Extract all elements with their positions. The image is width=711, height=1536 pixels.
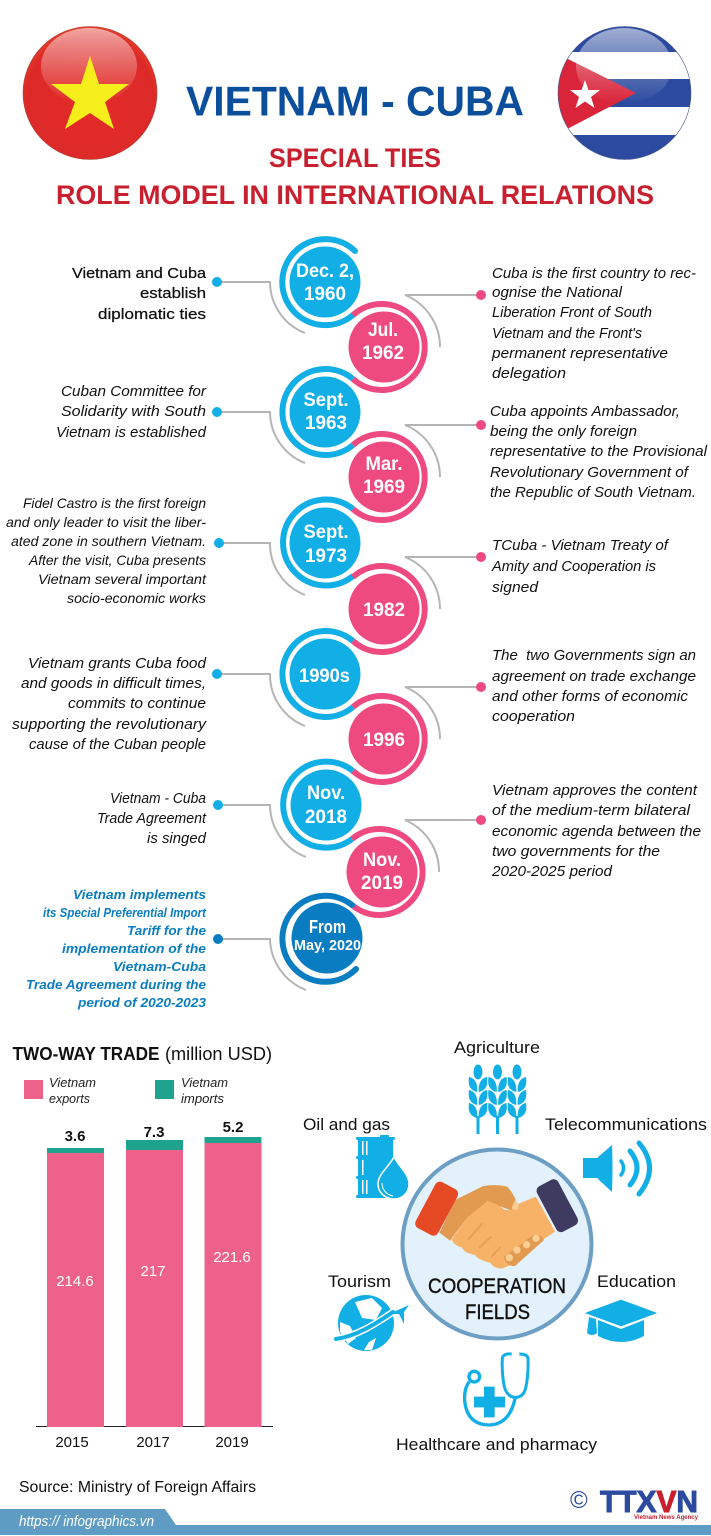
milestone: Dec. 2, 1960: Dec. 2, xyxy=(296,260,354,282)
field: agriculture: Agriculture xyxy=(454,1039,540,1057)
field: healthcare and pharmacy: Healthcare and pharmacy xyxy=(396,1436,598,1454)
milestone: Sept. 1973 xyxy=(214,500,360,595)
milestone: Sept. 1973: 1973 xyxy=(305,545,347,567)
bar: 2017 xyxy=(126,1124,183,1451)
text: diplomatic ties xyxy=(72,265,207,323)
milestone: 1982: 1982 xyxy=(363,599,405,621)
text: solidarity committee xyxy=(56,384,207,441)
source: Source: Ministry of Foreign Affairs xyxy=(19,1479,256,1496)
text: medium-term agenda: economic agenda between the xyxy=(492,824,701,840)
text: ambassador: being the only foreign xyxy=(490,424,637,440)
text: Fidel Castro visit: and only leader to visit the liber- xyxy=(6,514,206,530)
bar: 2017: 7.3 xyxy=(144,1124,164,1141)
text: ambassador xyxy=(490,404,708,501)
text: first country to recognise: permanent representative xyxy=(491,346,668,362)
text: Fidel Castro visit: ated zone in southern Vietnam. xyxy=(11,533,206,549)
text: trade agreement: is singed xyxy=(147,831,207,847)
text: Fidel Castro visit: Vietnam several important xyxy=(38,571,207,587)
text: treaty: Amity and Cooperation is xyxy=(491,559,656,575)
legend: exports xyxy=(49,1091,90,1106)
text: diplomatic ties: diplomatic ties xyxy=(98,306,206,323)
milestone: Nov. 2019: 2019 xyxy=(361,872,403,894)
icon: Vietnam flag xyxy=(23,26,157,160)
subtitle: SPECIAL TIES xyxy=(269,143,441,173)
text: ambassador: the Republic of South Vietnam. xyxy=(490,485,696,501)
title: VIETNAM - CUBA xyxy=(186,78,524,124)
subtitle: ROLE MODEL IN INTERNATIONAL RELATIONS xyxy=(56,180,654,210)
heading: two-way trade: TWO-WAY TRADE xyxy=(12,1044,160,1064)
bar: 2019: 221.6 xyxy=(213,1249,251,1266)
bar: 2019: 5.2 xyxy=(223,1119,243,1136)
icon: handshake xyxy=(413,1177,580,1269)
text: first country to recognise: Vietnam and the Front's xyxy=(492,326,642,342)
bar: 2019 xyxy=(204,1119,262,1451)
text: medium-term agenda: 2020-2025 period xyxy=(491,864,613,880)
text: trade agreement xyxy=(97,791,207,847)
field: agriculture xyxy=(454,1039,540,1134)
text: first country to recognise: Cuba is the first country to rec- xyxy=(492,266,696,282)
field: telecommunications: Telecommunications xyxy=(545,1116,707,1134)
heading: two-way trade xyxy=(12,1044,272,1064)
text: preferential tariff: Vietnam-Cuba xyxy=(113,960,206,974)
text: food and goods: supporting the revolutionary xyxy=(12,717,207,733)
milestone: Mar. 1969: 1969 xyxy=(363,476,405,498)
field: education xyxy=(583,1273,676,1342)
text: Fidel Castro visit xyxy=(6,495,207,606)
text: preferential tariff: Trade Agreement during the xyxy=(26,978,206,992)
bar: 2015: 2015 xyxy=(55,1434,89,1451)
milestone: Nov. 2019: Nov. xyxy=(363,849,401,871)
legend: Vietnam xyxy=(49,1075,96,1090)
field: education: Education xyxy=(597,1273,676,1291)
text: medium-term agenda: of the medium-term bilateral xyxy=(492,803,691,819)
field: oil and gas xyxy=(303,1116,409,1199)
text: trade exchange agreement: and other forms of economic xyxy=(492,689,689,705)
text: solidarity committee: Solidarity with South xyxy=(61,404,206,420)
milestone: Sept. 1963: 1963 xyxy=(305,412,347,434)
bar chart xyxy=(36,1119,273,1451)
text: treaty: TCuba - Vietnam Treaty of xyxy=(492,538,670,554)
icon: Cuba flag xyxy=(550,26,692,160)
field: telecommunications xyxy=(545,1116,707,1194)
bar: 2015 xyxy=(47,1128,104,1451)
footer bar xyxy=(0,1509,711,1535)
milestone: Jul. 1962: Jul. xyxy=(368,319,398,341)
text: trade exchange agreement: agreement on trade exchange xyxy=(492,669,696,685)
text: first country to recognise xyxy=(491,266,696,382)
legend: imports xyxy=(181,1091,224,1106)
bar: 2019: 2019 xyxy=(215,1434,249,1451)
milestone: Nov. 2018: Nov. xyxy=(307,782,345,804)
field: oil and gas: Oil and gas xyxy=(303,1116,390,1134)
text: food and goods: and goods in difficult times, xyxy=(21,676,206,692)
text: Fidel Castro visit: Fidel Castro is the first foreign xyxy=(23,495,206,511)
text: ambassador: Cuba appoints Ambassador, xyxy=(490,404,680,420)
bar: 2017: 2017 xyxy=(136,1434,170,1451)
text: trade exchange agreement: cooperation xyxy=(492,709,575,725)
label: cooperation fields: FIELDS xyxy=(465,1301,530,1324)
heading: two-way trade: (million USD) xyxy=(165,1044,272,1064)
text: preferential tariff xyxy=(26,888,207,1010)
milestone: Nov. 2019 xyxy=(346,815,486,915)
text: food and goods: commits to continue xyxy=(68,696,206,712)
logo: TTXVN: Vietnam News Agency xyxy=(634,1515,699,1521)
milestone: From May, 2020: From xyxy=(309,917,346,937)
text: medium-term agenda: two governments for the xyxy=(492,844,660,860)
text: trade agreement: Vietnam - Cuba xyxy=(110,791,206,807)
legend: Vietnam xyxy=(181,1075,228,1090)
text: diplomatic ties: establish xyxy=(140,285,206,302)
field: tourism: Tourism xyxy=(328,1273,391,1291)
milestone: Nov. 2018: 2018 xyxy=(305,806,347,828)
bar: 2015: 3.6 xyxy=(65,1128,85,1145)
milestone: Sept. 1973: Sept. xyxy=(304,521,348,543)
label: cooperation fields: COOPERATION xyxy=(428,1275,566,1298)
milestone: Jul. 1962: 1962 xyxy=(362,342,404,364)
text: first country to recognise: ognise the National xyxy=(492,285,623,301)
milestone: Mar. 1969 xyxy=(348,420,486,520)
text: treaty: signed xyxy=(492,580,539,596)
text: food and goods xyxy=(12,656,207,753)
text: ambassador: Revolutionary Government of xyxy=(490,465,690,481)
field: tourism xyxy=(328,1273,409,1351)
cooperation fields circle xyxy=(402,1150,592,1338)
text: Fidel Castro visit: After the visit, Cuba presents xyxy=(28,552,206,568)
text: preferential tariff: period of 2020-2023 xyxy=(77,996,206,1010)
text: trade agreement: Trade Agreement xyxy=(97,811,207,827)
label: cooperation fields xyxy=(428,1275,566,1324)
milestone: Dec. 2, 1960 xyxy=(212,239,360,333)
timeline xyxy=(212,239,486,990)
text: preferential tariff: its Special Preferential Import xyxy=(43,906,207,920)
logo: TTXVN: © xyxy=(570,1487,588,1514)
milestone: 1990s: 1990s xyxy=(299,665,350,687)
text: medium-term agenda xyxy=(491,783,701,880)
text: diplomatic ties: Vietnam and Cuba xyxy=(72,265,207,282)
text: food and goods: cause of the Cuban people xyxy=(29,737,206,753)
text: food and goods: Vietnam grants Cuba food xyxy=(28,656,207,672)
milestone: Nov. 2018 xyxy=(213,762,362,857)
text: ambassador: representative to the Provisional xyxy=(490,444,708,460)
text: Fidel Castro visit: socio-economic works xyxy=(67,590,206,606)
milestone: Sept. 1963 xyxy=(212,369,360,463)
text: treaty xyxy=(491,538,670,596)
text: preferential tariff: Vietnam implements xyxy=(73,888,206,902)
text: preferential tariff: implementation of the xyxy=(62,942,206,956)
milestone: 1982 xyxy=(348,552,486,652)
milestone: Mar. 1969: Mar. xyxy=(366,453,402,475)
milestone: From May, 2020 xyxy=(213,896,362,990)
text: trade exchange agreement: The two Governments sign an xyxy=(492,648,696,664)
text: first country to recognise: Liberation Front of South xyxy=(492,305,652,321)
bar: 2017: 217 xyxy=(140,1263,166,1280)
milestone: 1996 xyxy=(348,682,486,782)
text: trade exchange agreement xyxy=(492,648,696,725)
text: first country to recognise: delegation xyxy=(492,366,566,382)
milestone: From May, 2020: May, 2020 xyxy=(294,938,361,954)
milestone: 1996: 1996 xyxy=(363,729,405,751)
milestone: Sept. 1963: Sept. xyxy=(304,389,348,411)
text: solidarity committee: Cuban Committee for xyxy=(61,384,207,400)
text: solidarity committee: Vietnam is established xyxy=(56,425,207,441)
subtitle xyxy=(56,143,654,210)
field: healthcare and pharmacy xyxy=(396,1354,598,1454)
text: preferential tariff: Tariff for the xyxy=(127,924,206,938)
logo: TTXVN: TTXVN xyxy=(600,1484,698,1519)
legend xyxy=(24,1075,228,1106)
footer bar: https:// infographics.vn xyxy=(19,1513,154,1530)
milestone: 1990s xyxy=(212,631,360,726)
bar: 2015: 214.6 xyxy=(56,1273,94,1290)
text: medium-term agenda: Vietnam approves the content xyxy=(492,783,698,799)
milestone: Jul. 1962 xyxy=(348,290,486,390)
milestone: Dec. 2, 1960: 1960 xyxy=(304,283,346,305)
